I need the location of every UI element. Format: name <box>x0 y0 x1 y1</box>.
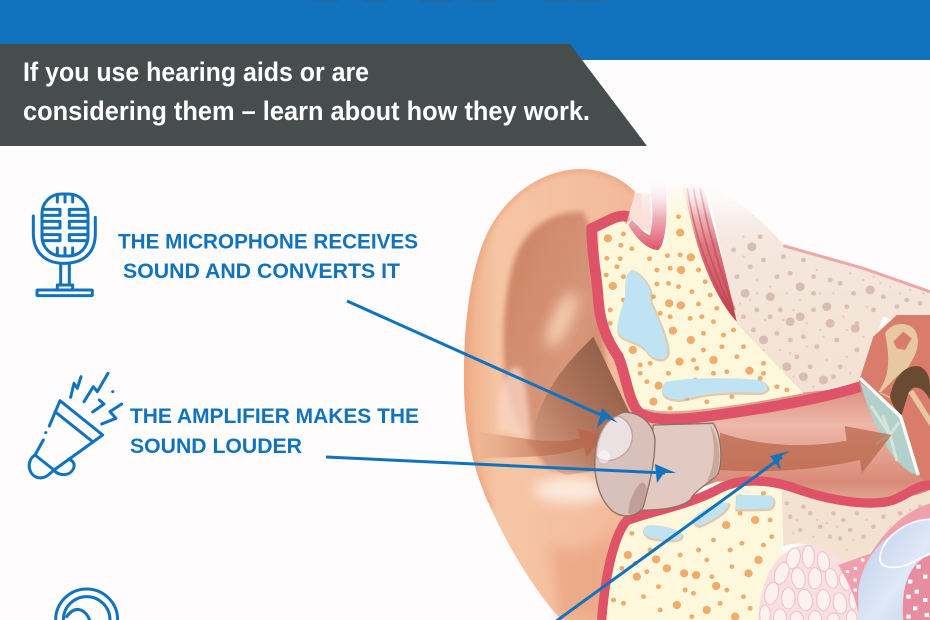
pink tissue around inner ear <box>838 503 930 620</box>
icon: ear receiver <box>56 589 118 620</box>
arrow: microphone pointer <box>347 301 618 428</box>
top fade <box>642 173 802 217</box>
muscle fibres <box>682 183 737 322</box>
ossicles <box>878 324 930 427</box>
outer ear <box>464 169 652 620</box>
arrow: amplifier pointer <box>326 457 676 483</box>
sound wave arrow: canal <box>720 426 892 473</box>
intro banner <box>0 44 647 146</box>
ear anatomy illustration <box>464 169 930 620</box>
skin fold notch <box>628 180 667 250</box>
lower bone <box>605 481 783 620</box>
label: microphone: SOUND AND CONVERTS IT <box>123 259 400 283</box>
upper canal wall <box>592 216 860 419</box>
icon: megaphone amplifier <box>29 373 122 478</box>
upper bone <box>598 183 803 411</box>
lower canal wall <box>602 481 930 620</box>
intro banner: If you use hearing aids or are <box>23 57 369 87</box>
hearing aid device <box>595 412 721 516</box>
tissue behind the ear canal <box>707 183 930 395</box>
middle ear cavity <box>858 315 930 500</box>
arrow: receiver pointer <box>555 451 790 620</box>
header band <box>0 0 930 60</box>
icon: microphone <box>33 194 95 296</box>
lower right tissue <box>782 487 930 565</box>
gland tissue <box>758 545 859 620</box>
eardrum <box>860 378 918 475</box>
ear canal <box>637 387 930 513</box>
intro banner: considering them – learn about how they work. <box>23 96 590 126</box>
label: amplifier: SOUND LOUDER <box>130 434 302 458</box>
label: amplifier: THE AMPLIFIER MAKES THE <box>130 404 419 428</box>
sound wave arrow: outer <box>478 428 604 458</box>
cochlea <box>858 518 930 620</box>
label: microphone <box>118 230 418 283</box>
label: microphone: THE MICROPHONE RECEIVES <box>118 230 418 254</box>
label: amplifier <box>130 404 419 458</box>
